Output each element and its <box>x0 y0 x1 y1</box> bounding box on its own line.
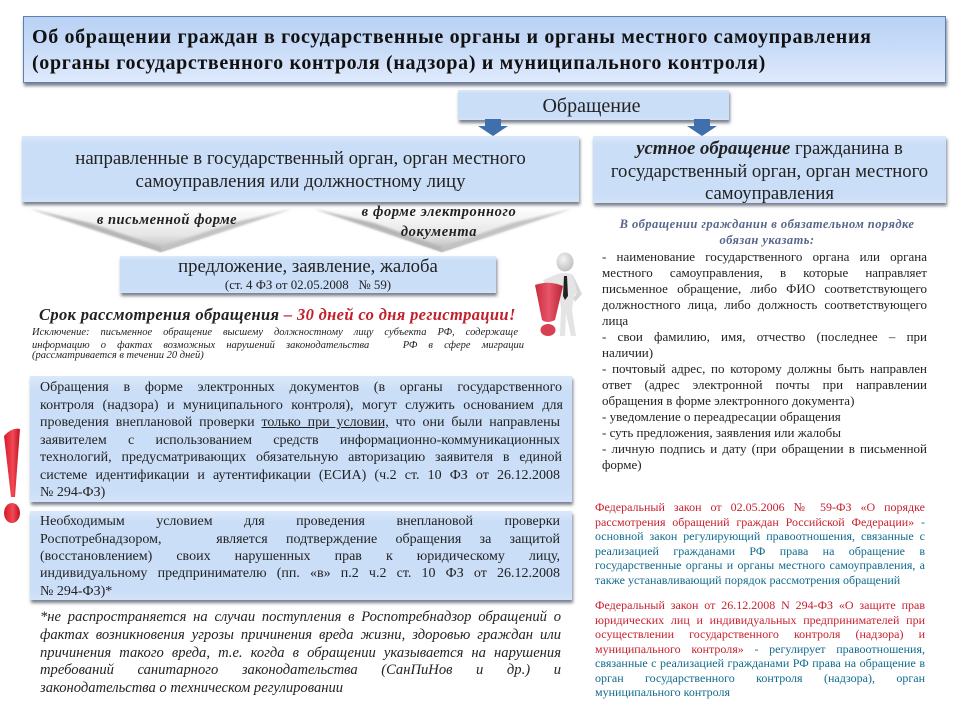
required contents list: форме) <box>602 457 642 472</box>
law note: 294-FZ: юридических лиц и индивидуальных предпринимателей при <box>595 612 925 626</box>
footnote: фактах возникновения угрозы причинения вреда жизни, здоровью граждан или <box>40 627 561 643</box>
required contents list: письменное обращение, либо ФИО соответствующего <box>602 281 927 296</box>
arrow: to oral appeal <box>687 119 717 136</box>
panel: proposal, statement, complaint <box>120 256 496 293</box>
panel: Rospotrebnadzor condition: № 294-ФЗ)* <box>40 584 112 599</box>
required contents list: наличии) <box>602 345 653 360</box>
required contents list: должностного лица, либо должность соответствующего <box>602 297 927 312</box>
required contents list: - почтовый адрес, по которому должны быть направлен <box>602 361 927 376</box>
panel: electronic documents condition: системе идентификации и аутентификации (ЕСИА) (ч.2 ст. 10 ФЗ от 26.12.2008 <box>40 468 560 483</box>
required contents heading: обязан указать: <box>719 233 815 247</box>
law note: 59-FZ: также устанавливающий порядок рассмотрения обращений <box>595 572 900 586</box>
law note: 59-FZ: государственные органы и органы местного самоуправления, а <box>595 558 925 572</box>
footnote: причинения такого вреда, т.е. когда в обращении указывается на нарушения <box>40 645 561 661</box>
panel: Rospotrebnadzor condition: Роспотребнадзором, является подтверждение обращения за защитой <box>40 532 560 547</box>
footnote: *не распространяется на случаи поступления в Роспотребнадзор обращений о <box>40 609 561 625</box>
panel: Rospotrebnadzor condition <box>30 511 572 600</box>
law note: 59-FZ: реализацией гражданами РФ права на обращение в <box>595 544 925 558</box>
required contents list: - уведомление о переадресации обращения <box>602 409 841 424</box>
panel: oral appeal: государственный орган, орган местного <box>611 160 928 182</box>
footnote: требований санитарного законодательства (СанПиНов и др.) и <box>40 662 561 678</box>
heading box: Обращение: Обращение <box>542 95 641 117</box>
figure: person leaning on exclamation mark <box>535 252 582 336</box>
law note: 59-FZ: основной закон регулирующий правоотношения, связанные с <box>595 529 925 543</box>
panel: proposal, statement, complaint: (ст. 4 ФЗ от 02.05.2008 № 59) <box>225 278 391 292</box>
required contents list: - наименование государственного органа или органа <box>602 249 927 264</box>
required contents list: местного самоуправления, в которые направляет <box>602 265 927 280</box>
required contents list: лица <box>602 313 628 328</box>
panel: electronic documents condition: № 294-ФЗ) <box>40 485 105 500</box>
footnote <box>40 609 561 696</box>
law note: 59-FZ: рассмотрения обращений граждан Российской Федерации» - <box>595 514 925 528</box>
title text <box>32 26 872 74</box>
arrow: to written appeal <box>478 119 508 136</box>
panel: directed appeal: направленные в государственный орган, орган местного <box>75 148 526 169</box>
label: electronic form: документа <box>401 224 477 240</box>
exception note: информацию о фактах возможных нарушений законодательства РФ в сфере миграции <box>32 340 524 350</box>
required contents list: обращения в форме электронного документа) <box>602 393 854 408</box>
review period heading: Срок рассмотрения обращения – 30 дней со дня регистрации! <box>39 305 516 324</box>
panel: oral appeal: самоуправления <box>705 183 834 204</box>
panel: oral appeal: устное обращение гражданина в <box>636 138 903 159</box>
form triangles <box>33 209 569 253</box>
label: written form: в письменной форме <box>97 212 237 228</box>
title text: Об обращении граждан в государственные органы и органы местного самоуправления <box>32 26 872 48</box>
law note: 294-FZ: Федеральный закон от 26.12.2008 N 294-ФЗ «О защите прав <box>595 598 925 612</box>
exception note: (рассматривается в течении 20 дней) <box>32 350 204 361</box>
law note: 59-FZ <box>595 500 925 586</box>
law note: 294-FZ <box>595 598 925 699</box>
title text: (органы государственного контроля (надзора) и муниципального контроля) <box>32 52 766 74</box>
icon: red exclamation mark <box>4 428 20 523</box>
title panel <box>23 16 946 83</box>
required contents list: ответ (адрес электронной почты при направлении <box>602 377 927 392</box>
required contents list: - личную подпись и дату (при обращении в письменной <box>602 441 927 456</box>
panel: electronic documents condition: проведения внеплановой проверки только при условии, что они были направлены <box>40 415 560 430</box>
label: electronic form: в форме электронного <box>362 204 516 220</box>
law note: 294-FZ: муниципального контроля <box>595 685 730 699</box>
required contents heading: В обращении гражданин в обязательном порядке <box>620 217 914 231</box>
exception note <box>32 327 524 361</box>
required contents list: - суть предложения, заявления или жалобы <box>602 425 841 440</box>
law note: 59-FZ: Федеральный закон от 02.05.2006 № 59-ФЗ «О порядке <box>595 500 925 514</box>
panel: Rospotrebnadzor condition: индивидуальному предпринимателю (пп. «в» п.2 ч.2 ст. 10 ФЗ от 26.12.2008 <box>40 566 560 581</box>
law note: 294-FZ: орган государственного контроля (надзора), орган <box>595 670 925 684</box>
panel: Rospotrebnadzor condition: Необходимым условием для проведения внеплановой проверки <box>40 514 560 529</box>
panel: proposal, statement, complaint: предложение, заявление, жалоба <box>178 256 438 277</box>
panel: electronic documents condition: Обращения в форме электронных документов (в органы государственного <box>40 380 562 395</box>
law note: 294-FZ: связанные с реализацией гражданами РФ права на обращение в <box>595 656 925 670</box>
panel: electronic documents condition: заявителем с использованием средств информационно-коммуникационных <box>40 433 560 448</box>
required contents list <box>602 249 927 472</box>
panel: Rospotrebnadzor condition: (восстановлением) своих нарушенных прав к юридическому лицу, <box>40 549 560 564</box>
required contents list: - свои фамилию, имя, отчество (последнее – при <box>602 329 927 344</box>
required contents heading <box>620 217 914 247</box>
footnote: законодательства о техническом регулировании <box>40 680 343 696</box>
label: electronic form <box>362 204 516 240</box>
panel: electronic documents condition: технологий, предусматривающих обязательную авторизацию заявителя в единой <box>40 450 562 465</box>
panel: directed appeal: самоуправления или должностному лицу <box>136 171 465 192</box>
panel: electronic documents condition: контроля (надзора) и муниципального контроля), могут служить основанием для <box>40 398 563 413</box>
panel: electronic documents condition <box>30 376 572 502</box>
law note: 294-FZ: муниципального контроля» - регулирует правоотношения, <box>595 642 925 656</box>
panel: oral appeal <box>593 136 946 203</box>
panel: directed appeal <box>22 136 579 202</box>
heading box: Обращение <box>458 90 729 120</box>
law note: 294-FZ: осуществлении государственного контроля (надзора) и <box>595 627 925 641</box>
exception note: Исключение: письменное обращение высшему должностному лицу субъекта РФ, содержаще <box>32 327 518 338</box>
